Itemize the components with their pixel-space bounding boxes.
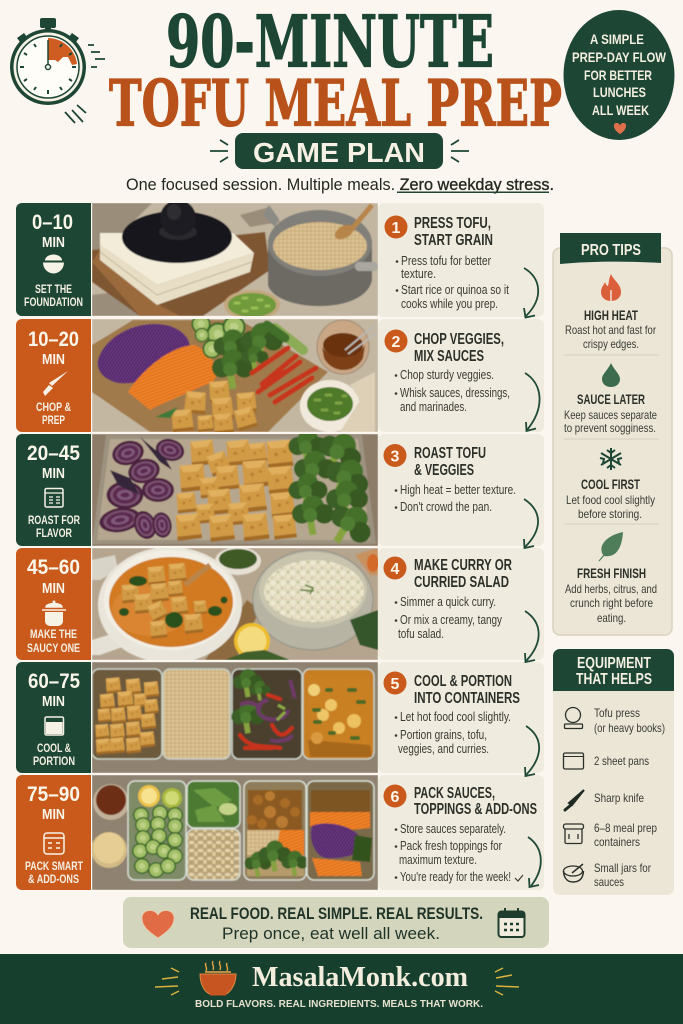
arrow: step 2 to 3	[525, 373, 540, 431]
tip: cool first	[566, 448, 655, 521]
step card 4: tofu salad.	[398, 627, 444, 641]
step card 2: 2	[392, 334, 401, 351]
step card 5	[378, 662, 544, 773]
time tab 45-60: MIN	[42, 580, 65, 597]
time tab 45-60: MAKE THE	[30, 629, 77, 641]
step card 3: ROAST TOFU	[414, 445, 486, 462]
photo: chopped vegetables and tofu on board	[92, 314, 378, 435]
step row 1	[16, 200, 544, 320]
time tab 75-90: PACK SMART	[25, 861, 83, 873]
item: meal prep containers: containers	[594, 835, 640, 849]
step card 6: Store sauces separately.	[400, 822, 506, 836]
decorative sparks	[155, 968, 519, 995]
step card 6: 6	[391, 789, 400, 806]
tip: fresh finish	[565, 532, 657, 625]
time tab 0-10: MIN	[42, 234, 65, 251]
time tab 75-90	[16, 775, 91, 890]
icon: steaming bowl	[200, 961, 236, 996]
panel: equipment that helps	[553, 649, 674, 895]
item: small jars	[564, 861, 651, 889]
step card 2: Whisk sauces, dressings,	[400, 386, 510, 400]
tip: cool first: Let food cool slightly	[566, 493, 655, 507]
arrow: step 5 to 6	[525, 726, 539, 776]
badge: prep-day flow oval: A SIMPLE	[590, 31, 644, 47]
step card 1: PRESS TOFU,	[414, 215, 491, 232]
step card 6: PACK SAUCES,	[414, 785, 495, 802]
tip: fresh finish: eating.	[597, 611, 626, 625]
time tab 0-10	[16, 203, 91, 316]
step card 4	[378, 548, 544, 660]
tip: cool first: before storing.	[578, 507, 642, 521]
item: small jars: sauces	[594, 875, 624, 889]
step card 5: 5	[391, 676, 400, 693]
tagline: BOLD FLAVORS. REAL INGREDIENTS. MEALS THAT WORK.	[195, 998, 483, 1010]
time tab 20-45: FLAVOR	[36, 528, 73, 540]
title: 90-MINUTE	[166, 0, 494, 84]
time tab 10-20	[16, 319, 91, 432]
step card 4: 4	[391, 561, 400, 578]
step card 1	[378, 203, 544, 317]
arrow: step 4 to 5	[525, 611, 539, 662]
step card 2: CHOP VEGGIES,	[414, 331, 504, 348]
time tab 20-45: ROAST FOR	[28, 515, 81, 527]
equipment heading	[553, 649, 674, 691]
tip: fresh finish: Add herbs, citrus, and	[565, 582, 657, 596]
item: tofu press	[564, 706, 665, 735]
step card 5: COOL & PORTION	[414, 673, 512, 690]
icon: stopwatch	[10, 18, 105, 123]
item: meal prep containers: 6–8 meal prep	[594, 821, 657, 835]
step card 2	[378, 319, 544, 432]
subtitle: One focused session. Multiple meals. Zero weekday stress.	[126, 175, 554, 194]
step card 1: cooks while you prep.	[401, 297, 498, 311]
time tab 10-20: MIN	[42, 351, 65, 368]
step card 5: veggies, and curries.	[398, 742, 489, 756]
arrow: step 3 to 4	[524, 499, 538, 548]
step row 3	[16, 434, 544, 546]
photo: food portioned into containers	[92, 662, 378, 773]
step card 6: maximum texture.	[399, 853, 477, 867]
tip: sauce later: Keep sauces separate	[564, 408, 657, 422]
step card 3	[378, 434, 544, 546]
callout: real food banner	[123, 897, 549, 948]
item: small jars: Small jars for	[594, 861, 651, 875]
arrow: step 6 to finish	[528, 837, 541, 887]
step card 3: High heat = better texture.	[400, 483, 516, 497]
step card 2: MIX SAUCES	[414, 348, 484, 365]
time tab 45-60: SAUCY ONE	[27, 643, 80, 655]
time tab 20-45: MIN	[42, 465, 65, 482]
tip: high heat: HIGH HEAT	[584, 307, 638, 323]
pro tips ribbon heading	[560, 233, 661, 264]
icon: heart	[142, 910, 174, 938]
time tab 0-10: SET THE	[35, 284, 72, 296]
icon: calendar	[498, 908, 524, 937]
time tab 45-60: 45–60	[27, 556, 80, 579]
time tab 75-90: MIN	[42, 806, 65, 823]
item: tofu press: (or heavy books)	[594, 721, 665, 735]
time tab 20-45: 20–45	[27, 442, 80, 465]
step card 1: Start rice or quinoa so it	[401, 283, 509, 297]
banner text	[190, 905, 483, 943]
time tab 10-20: CHOP &	[36, 402, 71, 414]
item: tofu press: Tofu press	[594, 706, 640, 720]
time tab 20-45	[16, 434, 91, 546]
step card 5: INTO CONTAINERS	[414, 690, 520, 707]
time tab 45-60	[16, 548, 91, 660]
footer	[0, 954, 683, 1024]
step card 2: Chop sturdy veggies.	[400, 368, 494, 382]
tip: sauce later: SAUCE LATER	[577, 391, 645, 407]
step card 6: Pack fresh toppings for	[400, 839, 502, 853]
tip: sauce later	[564, 363, 657, 435]
item: sheet pans	[564, 753, 649, 769]
time tab 75-90: & ADD-ONS	[28, 874, 79, 886]
step card 4: Simmer a quick curry.	[400, 595, 496, 609]
photo: pressing tofu and pot of grain	[92, 200, 378, 320]
time tab 0-10: FOUNDATION	[24, 297, 83, 309]
photo: packed containers, sauces and toppings	[91, 775, 378, 890]
step card 5: Portion grains, tofu,	[400, 728, 487, 742]
equipment heading: EQUIPMENT	[577, 655, 651, 672]
step row 4	[16, 547, 544, 663]
badge: prep-day flow oval: ALL WEEK	[592, 102, 649, 118]
item: sheet pans: 2 sheet pans	[594, 754, 649, 768]
step row 6	[16, 775, 544, 890]
arrow: step 1 to 2	[524, 268, 538, 318]
panel: pro tips	[553, 233, 672, 635]
step card 1: texture.	[401, 267, 436, 281]
step card 4: Or mix a creamy, tangy	[400, 613, 503, 627]
item: sharp knife: Sharp knife	[594, 791, 644, 805]
step card 1: Press tofu for better	[401, 254, 491, 268]
time tab 60-75: PORTION	[33, 756, 75, 768]
tip: sauce later: to prevent sogginess.	[564, 421, 656, 435]
banner text: REAL FOOD. REAL SIMPLE. REAL RESULTS.	[190, 905, 483, 923]
tip: fresh finish: crunch right before	[570, 596, 653, 610]
step card 4: CURRIED SALAD	[414, 574, 509, 591]
time tab 60-75: 60–75	[28, 670, 80, 693]
badge: prep-day flow oval: LUNCHES	[593, 84, 646, 100]
tip: high heat: crispy edges.	[583, 337, 639, 351]
badge: prep-day flow oval: FOR BETTER	[584, 67, 652, 83]
item: meal prep containers	[564, 821, 657, 849]
step row 2	[16, 314, 544, 435]
badge: prep-day flow oval	[564, 10, 674, 140]
tip: high heat: Roast hot and fast for	[565, 323, 656, 337]
item: sharp knife	[565, 790, 644, 810]
brand name: MasalaMonk.com	[252, 961, 468, 993]
step card 3: Don't crowd the pan.	[400, 500, 492, 514]
step row 5	[16, 662, 544, 773]
step card 1: START GRAIN	[414, 232, 493, 249]
badge: game plan: GAME PLAN	[253, 137, 425, 168]
tip: fresh finish: FRESH FINISH	[577, 565, 646, 581]
tip: high heat	[565, 274, 656, 351]
equipment heading: THAT HELPS	[576, 671, 652, 688]
step card 6: You're ready for the week!	[400, 870, 511, 884]
time tab 75-90: 75–90	[27, 783, 80, 806]
photo: roasted tofu and vegetables on sheet pan	[92, 434, 378, 546]
pro tips ribbon heading: PRO TIPS	[581, 242, 641, 259]
step card 6	[378, 775, 544, 890]
step card 1: 1	[392, 220, 401, 237]
badge: game plan	[210, 133, 469, 169]
time tab 60-75	[16, 662, 91, 773]
title	[109, 0, 562, 142]
step card 3: & VEGGIES	[414, 462, 474, 479]
step card 2: and marinades.	[400, 400, 467, 414]
time tab 60-75: MIN	[42, 693, 65, 710]
tip: cool first: COOL FIRST	[581, 476, 640, 492]
time tab 10-20: 10–20	[28, 328, 79, 351]
photo: tofu curry and curried salad	[92, 547, 379, 663]
step card 6: TOPPINGS & ADD-ONS	[414, 801, 537, 818]
step card 5: Let hot food cool slightly.	[400, 710, 511, 724]
time tab 10-20: PREP	[42, 415, 65, 427]
time tab 60-75: COOL &	[37, 743, 71, 755]
step card 4: MAKE CURRY OR	[414, 557, 512, 574]
banner text: Prep once, eat well all week.	[222, 925, 440, 943]
time tab 0-10: 0–10	[32, 211, 73, 234]
step card 3: 3	[391, 448, 400, 466]
